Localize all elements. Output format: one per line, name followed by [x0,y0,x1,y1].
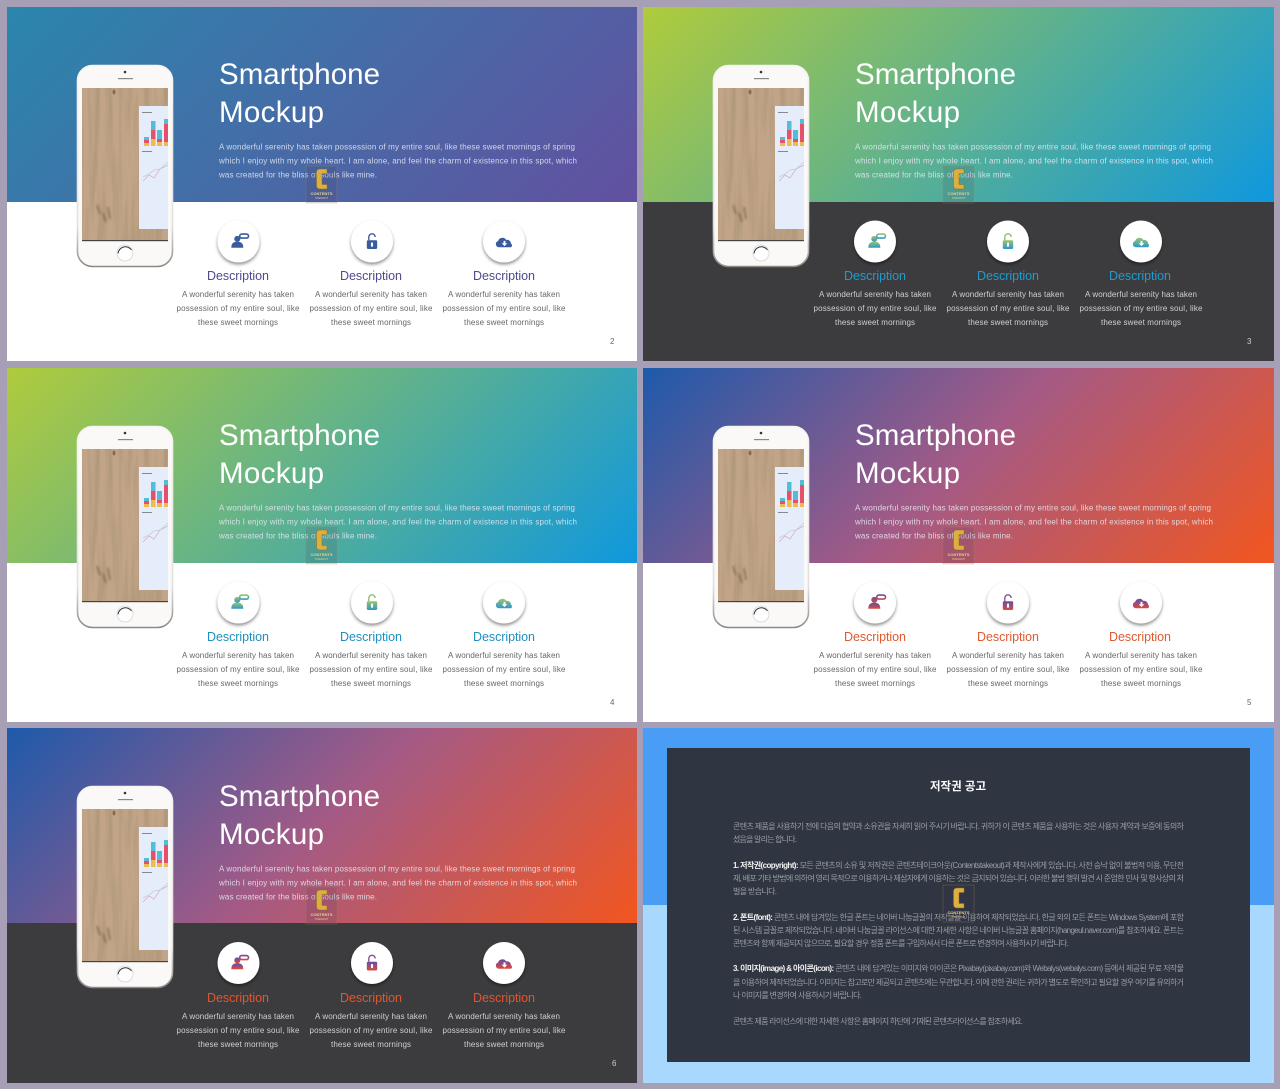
title: Smartphone [219,58,380,91]
phone mockup [78,426,172,628]
feature 1 [176,942,300,1049]
notice intro: 콘텐츠 제품을 사용하기 전에 다음의 협약과 소유권을 자세히 읽어 주시기 바랍니다. 귀하가 이 콘텐츠 제품을 사용하는 것은 사용자 계약과 보증에 동의하 [733,821,1185,831]
panel: slide 5 blue-red on white [643,368,1274,722]
feature 3: these sweet mornings [464,679,544,688]
title [219,419,380,490]
feature 3: possession of my entire soul, like [1080,304,1203,313]
intro text [854,504,1213,540]
notice section 3: 나 이미지를 변경하여 사용하시기 바랍니다. [733,990,862,1000]
feature 3: possession of my entire soul, like [442,304,566,313]
intro text: which I enjoy with my whole heart. I am alone, and feel the charm of existence in this spot, which [854,156,1213,166]
intro text: which I enjoy with my whole heart. I am alone, and feel the charm of existence in this spot, which [218,156,577,166]
feature 3: A wonderful serenity has taken [1085,290,1197,299]
feature 2: Description [340,991,402,1005]
title [219,780,380,851]
phone mockup [714,66,808,266]
feature 2: Description [977,269,1039,283]
gradient header band [643,7,1274,202]
feature 1: possession of my entire soul, like [814,665,937,674]
feature 1: A wonderful serenity has taken [182,651,294,660]
feature 2: A wonderful serenity has taken [952,651,1064,660]
feature 1: these sweet mornings [198,318,278,327]
feature 2: these sweet mornings [331,1040,411,1049]
watermark logo [943,166,974,203]
phone mockup [714,426,808,628]
feature 1 [176,220,300,327]
feature 3: A wonderful serenity has taken [448,651,560,660]
feature 1: Description [844,630,906,644]
notice section 1: 1. 저작권(copyright): 모든 콘텐츠의 소유 및 저작권은 콘텐츠테이크아웃(Contentstakeout)과 제작사에게 있습니다. 사전 승낙 없이 불법적 이용, 무단전 [733,860,1184,870]
intro text: which I enjoy with my whole heart. I am alone, and feel the charm of existence in this spot, which [218,878,577,888]
feature 3: Description [473,991,535,1005]
notice section 2: 콘텐츠와 함께 제공되지 않으므로, 필요할 경우 정품 폰트를 구입하셔서 다른 폰트로 변경하여 사용하시기 바랍니다. [733,938,1069,948]
feature 2: possession of my entire soul, like [310,304,433,313]
intro text: A wonderful serenity has taken possession of my entire soul, like these sweet mornings of spring [219,142,575,152]
feature 1: possession of my entire soul, like [176,665,300,674]
notice section 3: 3. 이미지(image) & 아이콘(icon): 콘텐츠 내에 담겨있는 이미지와 아이콘은 Pixabay(pixabay.com)와 Webalys(webalys.com) 등에서 제공된 무료 저작물 [733,963,1184,973]
feature 3: A wonderful serenity has taken [448,1012,560,1021]
feature 1: possession of my entire soul, like [176,304,300,313]
watermark logo [306,166,337,203]
gradient header band [7,728,637,923]
watermark logo [306,527,337,564]
feature 3 [1080,582,1203,688]
feature 1: these sweet mornings [835,679,915,688]
feature 1 [814,220,937,327]
feature 2: these sweet mornings [968,318,1048,327]
feature 1: Description [207,630,269,644]
notice section 2: 된 시스템 글꼴로 제작되었습니다. 네이버 나눔글꼴 라이선스에 대한 자세한 사항은 네이버 나눔글꼴 홈페이지(hangeul.naver.com)를 참조하세요. 폰트는 [733,925,1184,935]
title: Smartphone [855,419,1016,452]
notice section 1: 재, 배포 기타 방법에 의하여 영리 목적으로 이용하거나 제삼자에게 이용하는 것은 금지되어 있습니다. 이러한 불법 행위 발견 시 준엄한 민사 및 형사상의 처 [733,873,1184,883]
feature 2: possession of my entire soul, like [946,304,1070,313]
feature 3: Description [1109,269,1171,283]
feature 3: A wonderful serenity has taken [448,290,560,299]
feature 3: Description [1109,630,1171,644]
intro text: A wonderful serenity has taken possession of my entire soul, like these sweet mornings of spring [219,864,575,874]
feature 2 [310,220,433,327]
intro text: was created for the bliss of souls like mine. [218,892,377,902]
phone mockup [78,786,172,988]
panel: slide 2 blue-purple on white [7,7,637,361]
feature 2 [310,582,433,688]
title [855,419,1016,490]
title: Smartphone [219,780,380,813]
phone mockup [78,66,172,266]
feature 1: A wonderful serenity has taken [182,290,294,299]
feature 1: A wonderful serenity has taken [182,1012,294,1021]
panel: slide 6 blue-red on dark [7,728,637,1083]
intro text: was created for the bliss of souls like mine. [854,170,1013,180]
feature 3: possession of my entire soul, like [442,1026,566,1035]
feature 2: possession of my entire soul, like [310,1026,433,1035]
feature 2: possession of my entire soul, like [946,665,1070,674]
title [855,58,1016,129]
feature 1: Description [844,269,906,283]
feature 3: Description [473,269,535,283]
intro text: was created for the bliss of souls like mine. [218,532,377,540]
intro text: A wonderful serenity has taken possession of my entire soul, like these sweet mornings of spring [855,142,1211,152]
feature 2 [946,582,1070,688]
feature 1 [176,582,300,688]
feature 3: possession of my entire soul, like [442,665,566,674]
watermark logo [306,887,337,924]
notice section 3 [733,963,1184,1000]
feature 2: these sweet mornings [331,318,411,327]
feature 3: A wonderful serenity has taken [1085,651,1197,660]
feature 2: A wonderful serenity has taken [315,290,427,299]
notice section 2 [733,912,1185,948]
intro text [854,142,1213,180]
gradient header band [7,368,637,563]
feature 1: Description [207,991,269,1005]
feature 1: these sweet mornings [835,318,915,327]
feature 3 [1080,220,1203,327]
feature 3: these sweet mornings [464,1040,544,1049]
feature 2: possession of my entire soul, like [310,665,433,674]
notice intro [733,821,1185,844]
feature 2: Description [977,630,1039,644]
panel: slide 3 green-blue on dark [643,7,1274,361]
feature 1 [814,582,937,688]
intro text: A wonderful serenity has taken possession of my entire soul, like these sweet mornings of spring [855,504,1211,512]
notice section 1: 벌을 받습니다. [733,886,777,896]
intro text: was created for the bliss of souls like mine. [218,170,377,180]
feature 1: A wonderful serenity has taken [819,651,931,660]
title: Mockup [219,96,324,129]
page number: 5 [1247,698,1252,707]
watermark logo [943,527,974,564]
intro text: was created for the bliss of souls like mine. [854,532,1013,540]
panel: copyright notice [643,728,1274,1083]
feature 2: A wonderful serenity has taken [315,651,427,660]
feature 3: these sweet mornings [1101,679,1181,688]
watermark logo [943,885,974,922]
title: Mockup [855,96,960,129]
feature 2: A wonderful serenity has taken [315,1012,427,1021]
title: Mockup [855,457,960,490]
feature 2: these sweet mornings [331,679,411,688]
feature 2: Description [340,630,402,644]
feature 1: these sweet mornings [198,679,278,688]
intro text [218,142,577,180]
intro text: which I enjoy with my whole heart. I am alone, and feel the charm of existence in this spot, which [854,518,1213,526]
feature 2: A wonderful serenity has taken [952,290,1064,299]
feature 1: these sweet mornings [198,1040,278,1049]
feature 2 [310,942,433,1049]
feature 3 [442,942,566,1049]
page number: 2 [610,337,615,346]
page number: 4 [610,698,615,707]
intro text [218,504,577,540]
notice heading: 저작권 공고 [930,779,986,793]
gradient header band [643,368,1274,563]
panel: slide 4 green-blue on white [7,368,637,722]
title: Mockup [219,818,324,851]
feature 1: possession of my entire soul, like [814,304,937,313]
intro text: A wonderful serenity has taken possession of my entire soul, like these sweet mornings of spring [219,504,575,512]
notice section 1 [733,860,1184,896]
title [219,58,380,129]
feature 2 [946,220,1070,327]
feature 1: Description [207,269,269,283]
intro text: which I enjoy with my whole heart. I am alone, and feel the charm of existence in this spot, which [218,518,577,526]
notice intro: 셨음을 알리는 합니다. [733,834,797,844]
feature 1: possession of my entire soul, like [176,1026,300,1035]
feature 3 [442,582,566,688]
intro text [218,864,577,902]
feature 3: possession of my entire soul, like [1080,665,1203,674]
notice footer: 콘텐츠 제품 라이선스에 대한 자세한 사항은 홈페이지 하단에 기재된 콘텐츠라이선스를 참조하세요. [733,1016,1023,1026]
feature 1: A wonderful serenity has taken [819,290,931,299]
feature 3: these sweet mornings [464,318,544,327]
notice section 3: 을 이용하여 제작되었습니다. 이미지는 참고로만 제공되고 콘텐츠에는 무관합니다. 이에 관한 권리는 귀하가 별도로 확인하고 필요할 경우 여기를 유의하거 [733,977,1184,987]
feature 3: these sweet mornings [1101,318,1181,327]
feature 2: these sweet mornings [968,679,1048,688]
page number: 6 [612,1059,617,1068]
feature 2: Description [340,269,402,283]
feature 3 [442,220,566,327]
notice section 2: 2. 폰트(font): 콘텐츠 내에 담겨있는 한글 폰트는 네이버 나눔글꼴의 저작물을 이용하여 제작되었습니다. 한글 외의 모든 폰트는 Windows System에 포함 [733,912,1185,922]
title: Smartphone [219,419,380,452]
title: Smartphone [855,58,1016,91]
page number: 3 [1247,337,1252,346]
title: Mockup [219,457,324,490]
feature 3: Description [473,630,535,644]
gradient header band [7,7,637,202]
